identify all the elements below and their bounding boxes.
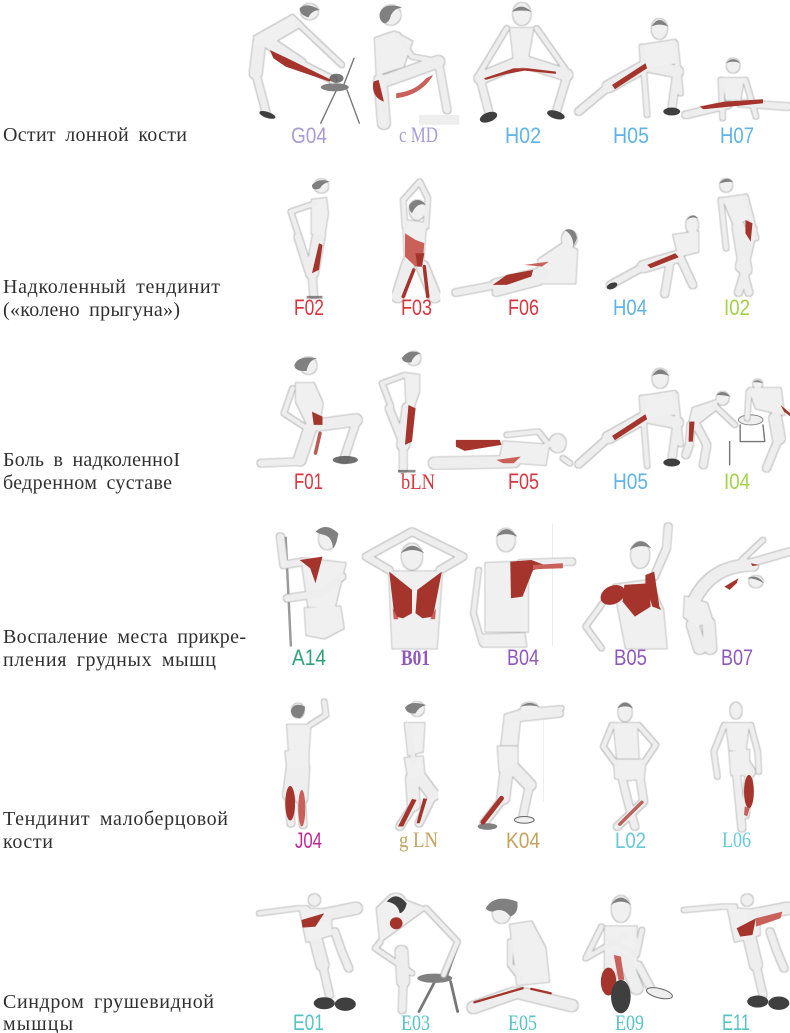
figure: stretch L06 bbox=[714, 702, 759, 828]
code: H05 repeat: H05 bbox=[613, 469, 648, 494]
figure: stretch bLN bbox=[382, 351, 421, 473]
panel: row 3, patellofemoral pain bbox=[3, 351, 790, 494]
figure: stretch B04 bbox=[473, 523, 572, 647]
heading: row 3: Боль в надколенноI bbox=[3, 449, 180, 471]
figure: stretch B07 bbox=[684, 540, 790, 648]
figure: stretch J04 bbox=[285, 702, 326, 827]
figure: stretch L02 bbox=[603, 702, 656, 827]
heading: row 4: Воспаление места прикре- bbox=[3, 626, 246, 648]
figure: stretch F02 bbox=[291, 179, 330, 299]
figure: stretch B01 bbox=[366, 532, 463, 648]
panel: row 4, pectoral insertion bbox=[3, 523, 790, 671]
heading: row 2: («колено прыгуна») bbox=[3, 299, 180, 321]
figure: stretch E03 bbox=[375, 893, 458, 1012]
figure: stretch H05 repeat bbox=[579, 368, 681, 467]
figure: stretch G04 bbox=[254, 4, 359, 123]
code: H02: H02 bbox=[505, 123, 541, 148]
code: I02: I02 bbox=[724, 295, 750, 320]
heading: row 6: Синдром грушевидной bbox=[3, 991, 214, 1013]
code: c MD: c MD bbox=[399, 122, 438, 147]
code: F03: F03 bbox=[401, 295, 432, 320]
code: B05: B05 bbox=[614, 645, 647, 670]
code: F02: F02 bbox=[294, 295, 324, 320]
figure: stretch I02 bbox=[719, 179, 756, 293]
code: L06: L06 bbox=[722, 827, 751, 852]
figure: stretch F06 bbox=[456, 229, 577, 293]
code: F05: F05 bbox=[508, 469, 539, 494]
heading: row 1: Остит лонной кости bbox=[3, 124, 187, 146]
figure: stretch H07 bbox=[686, 58, 788, 118]
code: H07: H07 bbox=[720, 123, 754, 148]
heading: row 5: Тендинит малоберцовой bbox=[3, 808, 228, 830]
figure: stretch F01 bbox=[261, 357, 358, 464]
heading: row 2: Надколенный тендинит bbox=[3, 276, 220, 298]
panel: row 2, jumper's knee bbox=[3, 179, 756, 321]
panel: row 1, pubic osteitis bbox=[3, 3, 788, 148]
code: F06: F06 bbox=[508, 295, 539, 320]
figure: stretch B05 bbox=[586, 527, 668, 648]
heading: row 5: кости bbox=[3, 831, 53, 853]
code: gLN: g LN bbox=[399, 827, 438, 852]
figure: stretch F05 bbox=[435, 432, 570, 465]
code: L02: L02 bbox=[615, 828, 646, 853]
figure: stretch F03 bbox=[398, 182, 435, 297]
code: J04: J04 bbox=[295, 828, 322, 853]
code: B04: B04 bbox=[507, 645, 539, 670]
figure: stretch E09 bbox=[586, 896, 674, 1013]
code: F01: F01 bbox=[294, 469, 323, 494]
code: H05: H05 bbox=[613, 123, 649, 148]
figure: stretch c MD bbox=[373, 5, 459, 125]
figure: stretch I04 bbox=[686, 379, 790, 468]
code: bLN: bLN bbox=[401, 469, 435, 494]
code: B07: B07 bbox=[721, 645, 753, 670]
code: A14: A14 bbox=[292, 645, 326, 670]
heading: row 4: пления грудных мышц bbox=[3, 649, 216, 671]
code: H04: H04 bbox=[613, 295, 647, 320]
figure: stretch E11 bbox=[684, 894, 789, 1010]
code: I04: I04 bbox=[724, 469, 750, 494]
figure: stretch H04 bbox=[606, 215, 698, 294]
code: B01: B01 bbox=[401, 645, 430, 670]
figure: stretch E01 bbox=[259, 894, 356, 1011]
panel: row 6, piriformis syndrome bbox=[3, 893, 789, 1033]
heading: row 3: бедренном суставе bbox=[3, 472, 172, 494]
panel: row 5, peroneal tendinitis bbox=[3, 702, 759, 853]
code: G04: G04 bbox=[291, 123, 327, 148]
figure: stretch A14 bbox=[280, 527, 345, 647]
figure: stretch E05 bbox=[473, 899, 572, 1008]
figure: stretch K04 bbox=[478, 702, 561, 830]
code: K04: K04 bbox=[506, 828, 540, 853]
figure: stretch gLN bbox=[398, 702, 433, 827]
figure: stretch H02 bbox=[478, 3, 568, 125]
figure: stretch H05 bbox=[579, 19, 681, 116]
